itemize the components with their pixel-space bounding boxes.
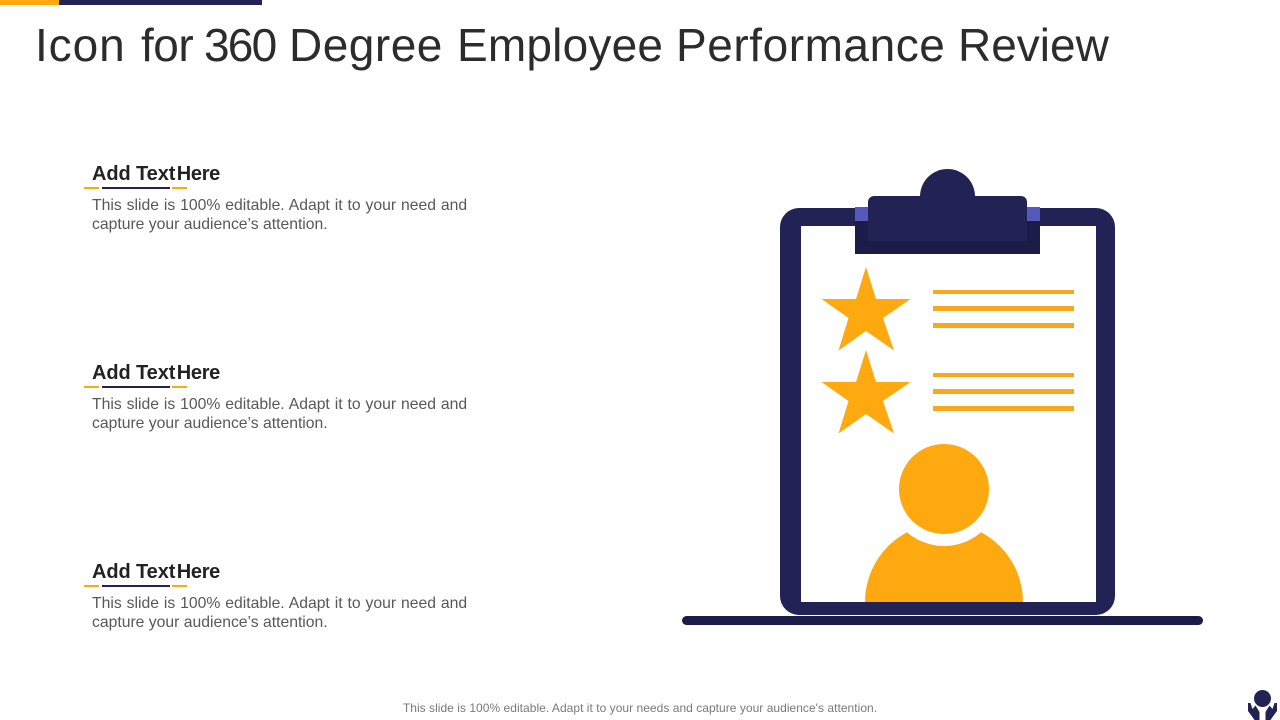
text lines 2 [933, 373, 1074, 411]
body text 2 [92, 396, 467, 432]
title: Employee [457, 19, 663, 71]
icon: star 2 [822, 350, 910, 434]
title: for [141, 19, 193, 71]
title [35, 19, 1109, 71]
icon: clipboard board [780, 208, 1115, 615]
icon: clipboard clip [855, 169, 1040, 254]
ground line [682, 616, 1203, 625]
footer note: This slide is 100% editable. Adapt it to your needs and capture your audience's attention. [403, 701, 877, 715]
underline 3 [84, 585, 187, 587]
body text 1: This slide is 100% editable. Adapt it to your need and [92, 197, 467, 214]
body text 3: This slide is 100% editable. Adapt it to your need and [92, 595, 467, 612]
heading 3: Add Text Here [92, 561, 220, 583]
icon: person [865, 432, 1023, 602]
title: 360 [204, 19, 275, 71]
text lines 1 [933, 290, 1074, 328]
text block 2 [84, 362, 467, 432]
title: Performance [676, 19, 945, 71]
heading 1: Add Text Here [92, 163, 220, 185]
title: Icon [35, 19, 126, 71]
body text 1: capture your audience’s attention. [92, 216, 328, 233]
text block 3 [84, 561, 467, 631]
body text 2: capture your audience’s attention. [92, 415, 328, 432]
underline 2 [84, 386, 187, 388]
body text 3 [92, 595, 467, 631]
icon: star 1 [822, 267, 910, 350]
underline 1 [84, 187, 187, 189]
title: Review [958, 19, 1109, 71]
top accent bar [0, 0, 262, 5]
body text 1 [92, 197, 467, 233]
body text 3: capture your audience’s attention. [92, 614, 328, 631]
text block 1 [84, 163, 467, 233]
body text 2: This slide is 100% editable. Adapt it to your need and [92, 396, 467, 413]
heading 2: Add Text Here [92, 362, 220, 384]
title: Degree [289, 19, 443, 71]
icon: hands holding circle logo [1248, 690, 1277, 720]
